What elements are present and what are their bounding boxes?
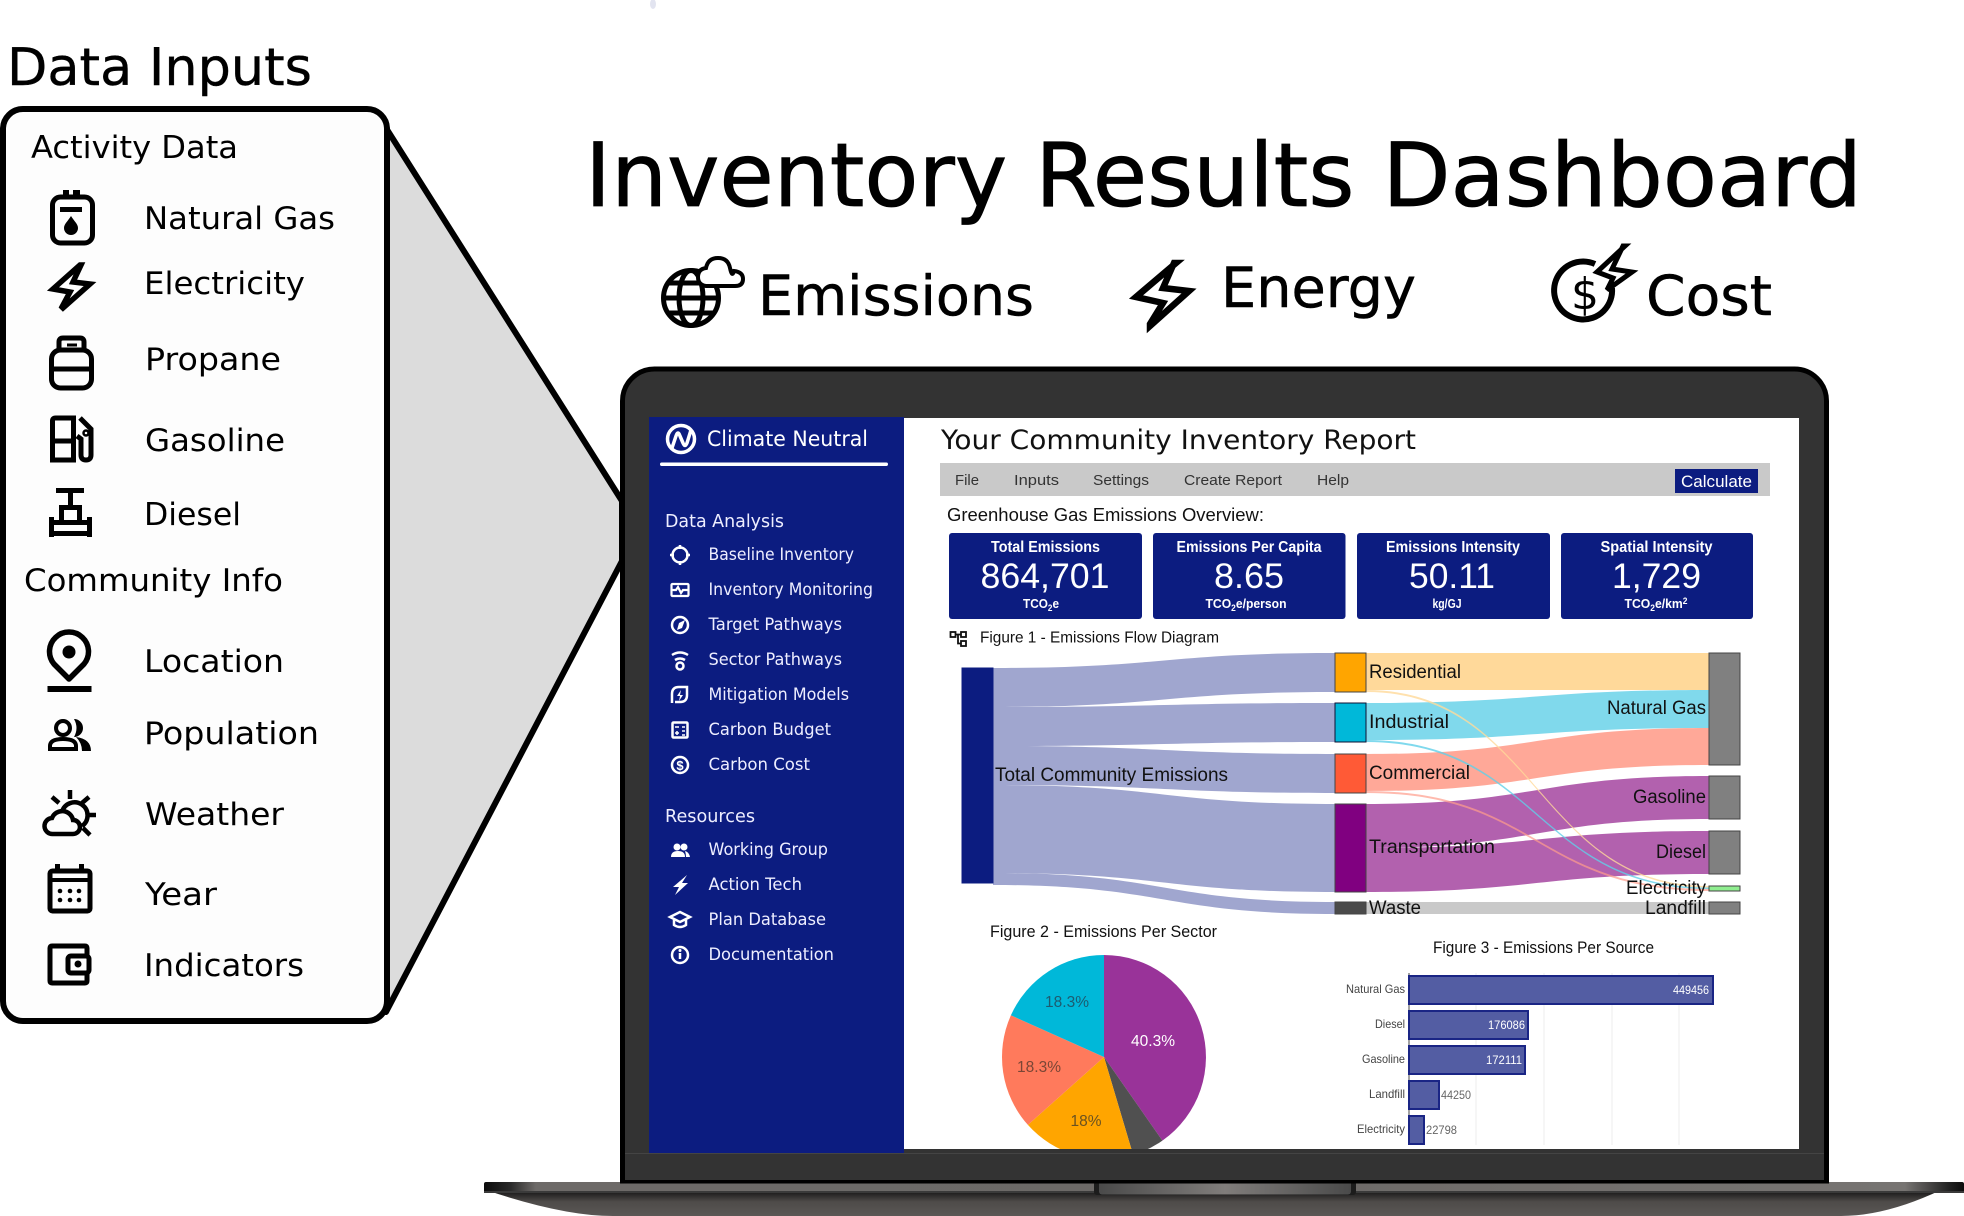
- label: Energy: Energy: [1221, 256, 1416, 320]
- chart: emissions per source bars: Gasoline: [1362, 1052, 1405, 1066]
- icon: flow diagram: [950, 632, 966, 646]
- logo: Climate Neutral: Climate Neutral: [707, 427, 868, 451]
- icon: natural gas meter: [52, 190, 92, 243]
- figure 1 heading: Figure 1 - Emissions Flow Diagram: [980, 630, 1219, 646]
- title: Inventory Results Dashboard: [585, 124, 1862, 227]
- icon: dollar coin with bolt: $: [1571, 269, 1599, 320]
- nav section: Data Analysis: [665, 512, 873, 774]
- label: Gasoline: Gasoline: [145, 423, 285, 459]
- toolbar: Settings: [1093, 472, 1149, 489]
- panel: report screen: [904, 418, 1799, 1159]
- toolbar: File: [955, 472, 979, 489]
- nav item: Carbon Budget: Carbon Budget: [708, 720, 832, 739]
- nav section: Data Analysis: Data Analysis: [665, 512, 784, 532]
- chart: emissions per source bars: Landfill: [1369, 1087, 1405, 1101]
- category: Emissions: [664, 258, 1034, 328]
- KPI card: Total Emissions: 864,701: [980, 557, 1110, 596]
- chart: emissions per source bars: [1346, 973, 1713, 1145]
- KPI card: Emissions Per Capita: e/person: [1236, 596, 1287, 611]
- label: Cost: Cost: [1646, 264, 1772, 328]
- sankey labels: Gasoline: [1633, 787, 1706, 808]
- KPI card: Emissions Intensity: [1357, 533, 1550, 619]
- nav item: Baseline Inventory: Baseline Inventory: [708, 545, 854, 564]
- nav item: Action Tech: Action Tech: [708, 875, 802, 894]
- sankey links: total to sectors: [993, 653, 1335, 914]
- label: Indicators: Indicators: [144, 948, 304, 984]
- icon: gasoline pump: [50, 418, 91, 462]
- icon: electricity bolt: [53, 265, 90, 308]
- icon: diesel valve: [49, 488, 92, 537]
- icon: location pin: [48, 632, 92, 692]
- label: Weather: Weather: [145, 797, 284, 833]
- subheading: overview: Greenhouse Gas Emissions Overview:: [947, 505, 1264, 525]
- chart: emissions per sector pie: 18.3%: [1017, 1059, 1061, 1076]
- icon: indicators wallet: [50, 946, 89, 983]
- icon: dollar coin with bolt: [1554, 246, 1632, 320]
- label: Diesel: Diesel: [144, 497, 241, 533]
- KPI card: Emissions Intensity: Emissions Intensity: [1386, 539, 1520, 556]
- chart: emissions sankey flow diagram: [962, 653, 1740, 919]
- figure 3 heading: Figure 3 - Emissions Per Source: [1433, 939, 1654, 957]
- KPI card: Spatial Intensity: 2: [1683, 596, 1688, 606]
- icon: energy bolt: [1136, 263, 1189, 326]
- KPI card: Spatial Intensity: [1561, 533, 1753, 619]
- laptop bezel: [622, 369, 1826, 1181]
- sankey labels: Natural Gas: [1607, 698, 1706, 719]
- KPI card: Emissions Per Capita: 8.65: [1214, 557, 1284, 596]
- sankey nodes: [962, 653, 1740, 914]
- toolbar: Help: [1317, 472, 1349, 489]
- sankey labels: Electricity: [1626, 878, 1706, 899]
- KPI card: Emissions Intensity: kg/GJ: [1432, 596, 1462, 611]
- button: Calculate: Calculate: [1681, 472, 1752, 491]
- nav item: Target Pathways: Target Pathways: [708, 615, 842, 634]
- sankey links: sectors to sources: [1366, 653, 1709, 914]
- KPI card: Emissions Per Capita: 2: [1231, 603, 1236, 613]
- chart: emissions per sector pie: 18%: [1070, 1113, 1102, 1130]
- KPI card: Spatial Intensity: TCO: [1624, 596, 1652, 611]
- chart: emissions per source bars: 44250: [1441, 1088, 1471, 1102]
- sankey labels: Commercial: [1369, 763, 1470, 784]
- sankey labels: Diesel: [1656, 842, 1706, 863]
- chart: emissions per source bars: Natural Gas: [1346, 982, 1405, 996]
- KPI card: Emissions Per Capita: [1153, 533, 1346, 619]
- callout: zoom wedge connecting panel to laptop: [386, 128, 622, 1012]
- nav item: Mitigation Models: Mitigation Models: [708, 685, 849, 704]
- icon: propane tank: [51, 338, 92, 388]
- chart: emissions per source bars: 449456: [1673, 983, 1709, 997]
- sankey labels: Transportation: [1369, 837, 1495, 858]
- sankey labels: Total Community Emissions: [995, 765, 1228, 786]
- label: Electricity: Electricity: [144, 266, 305, 302]
- category: Cost: [1554, 246, 1772, 328]
- heading: Community Info: Community Info: [24, 563, 283, 599]
- nav section: Resources: [665, 807, 834, 964]
- KPI card: Total Emissions: TCO: [1023, 596, 1050, 611]
- KPI card: Spatial Intensity: 2: [1650, 603, 1655, 613]
- label: Propane: Propane: [145, 342, 281, 378]
- KPI card: Spatial Intensity: e/km: [1655, 596, 1683, 611]
- figure 2 heading: Figure 2 - Emissions Per Sector: [990, 923, 1217, 941]
- toolbar: [940, 463, 1770, 496]
- heading: report title: Your Community Inventory Report: [940, 425, 1416, 456]
- nav item: Carbon Cost: $: [676, 758, 684, 773]
- icon: globe with cloud: [664, 258, 743, 326]
- KPI card: Emissions Per Capita: Emissions Per Capita: [1176, 539, 1322, 556]
- laptop: [484, 369, 1964, 1216]
- KPI card: Total Emissions: 2: [1048, 603, 1052, 613]
- panel: data inputs list: [3, 109, 387, 1021]
- label: Emissions: Emissions: [758, 264, 1034, 328]
- KPI card: Total Emissions: [949, 533, 1142, 619]
- heading: Data Inputs: Data Inputs: [7, 38, 312, 98]
- heading: Activity Data: Activity Data: [31, 130, 238, 166]
- KPI card: Total Emissions: Total Emissions: [991, 539, 1100, 556]
- nav item: Working Group: Working Group: [708, 840, 828, 859]
- chart: emissions per source bars: 172111: [1486, 1053, 1522, 1067]
- chart: emissions per sector pie: 18.3%: [1045, 994, 1089, 1011]
- chart: emissions per source bars: 176086: [1488, 1018, 1525, 1032]
- label: Year: Year: [144, 877, 217, 913]
- nav item: Plan Database: Plan Database: [708, 910, 826, 929]
- nav section: Resources: Resources: [665, 807, 755, 827]
- icon: year calendar: [48, 864, 92, 911]
- toolbar: Inputs: [1014, 472, 1059, 489]
- sankey labels: Residential: [1369, 662, 1461, 683]
- nav item: Documentation: Documentation: [708, 945, 834, 964]
- chart: emissions per sector pie: [1002, 955, 1206, 1159]
- sankey labels: Waste: [1369, 898, 1421, 919]
- nav item: Carbon Cost: Carbon Cost: [708, 755, 811, 774]
- category: Energy: [1136, 256, 1416, 326]
- label: Natural Gas: Natural Gas: [144, 201, 335, 237]
- chart: emissions per source bars: Electricity: [1357, 1122, 1405, 1136]
- chart: emissions per source bars: 22798: [1426, 1123, 1457, 1137]
- laptop base: [484, 1181, 1964, 1216]
- chart: emissions per sector pie: 40.3%: [1131, 1033, 1175, 1050]
- chart: emissions per source bars: Diesel: [1375, 1017, 1405, 1031]
- icon: weather sun and cloud: [45, 790, 96, 835]
- sankey labels: Landfill: [1645, 898, 1706, 919]
- nav item: Inventory Monitoring: Inventory Monitoring: [708, 580, 873, 599]
- label: Location: Location: [144, 644, 284, 680]
- button: Calculate: [1675, 469, 1758, 493]
- label: Population: Population: [144, 716, 319, 752]
- KPI card: Emissions Per Capita: TCO: [1206, 596, 1233, 611]
- panel: sidebar navigation: [649, 417, 904, 1153]
- sankey labels: Industrial: [1369, 712, 1449, 733]
- icon: population people: [50, 719, 91, 751]
- sankey labels: [995, 662, 1706, 919]
- KPI card: Total Emissions: e: [1052, 596, 1059, 611]
- KPI card: Emissions Intensity: 50.11: [1409, 557, 1495, 596]
- nav item: Action Tech: [673, 875, 802, 895]
- toolbar: Create Report: [1184, 472, 1283, 489]
- nav item: Sector Pathways: Sector Pathways: [708, 650, 842, 669]
- KPI card: Spatial Intensity: Spatial Intensity: [1600, 539, 1713, 556]
- KPI card: Spatial Intensity: 1,729: [1612, 557, 1701, 596]
